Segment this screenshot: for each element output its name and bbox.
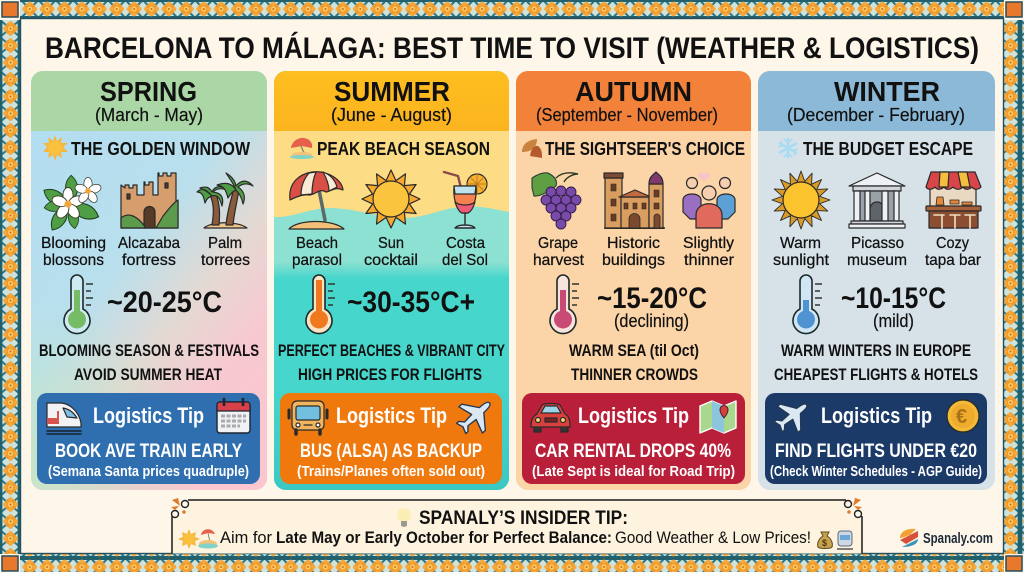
icon: picasso museum xyxy=(849,173,905,228)
icon: money bag: $ xyxy=(822,538,827,548)
label: Slightly xyxy=(683,235,734,252)
logistics tip: autumn xyxy=(522,393,745,484)
spring months: (March - May) xyxy=(95,105,203,125)
icon: parasol emoji xyxy=(290,138,314,159)
icon: blossoms xyxy=(41,175,102,233)
label xyxy=(533,235,585,269)
icon: train xyxy=(837,531,853,549)
label: thinner xyxy=(684,252,735,269)
corner ornament right xyxy=(844,498,864,518)
insider text xyxy=(220,528,811,547)
icon: euro coin: € xyxy=(956,406,967,428)
temperature: ~10-15°C xyxy=(841,282,946,315)
icon: car xyxy=(531,404,570,432)
autumn notes: THINNER CROWDS xyxy=(571,365,698,384)
summer body xyxy=(274,71,509,490)
insider text: Aim for xyxy=(220,528,272,547)
icon: sun emoji xyxy=(43,135,68,161)
temperature: ~15-20°C xyxy=(597,282,707,315)
summer heading: SUMMER xyxy=(334,76,450,107)
logistics main: CAR RENTAL DROPS 40% xyxy=(535,440,731,462)
logistics title: Logistics Tip xyxy=(336,403,447,428)
icon: grapes xyxy=(532,173,581,229)
autumn body xyxy=(516,71,751,490)
label: Sun xyxy=(378,235,404,252)
spring body xyxy=(31,71,267,490)
label: blossons xyxy=(43,252,104,269)
logistics main: BOOK AVE TRAIN EARLY xyxy=(55,440,242,462)
label xyxy=(364,235,418,269)
label: Historic xyxy=(607,235,660,252)
summer notes: PERFECT BEACHES & VIBRANT CITY xyxy=(278,341,505,360)
logistics title: Logistics Tip xyxy=(93,403,204,428)
summer notes: HIGH PRICES FOR FLIGHTS xyxy=(298,365,482,384)
icon: train xyxy=(47,403,81,434)
label xyxy=(442,235,488,269)
label: Warm xyxy=(780,235,821,252)
icon: snowflake xyxy=(778,138,798,158)
label xyxy=(773,235,830,269)
label: Cozy xyxy=(936,235,969,252)
panel: autumn xyxy=(516,71,751,490)
winter heading: WINTER xyxy=(834,76,940,107)
label: del Sol xyxy=(442,252,488,269)
insider box xyxy=(172,500,862,554)
panel: winter xyxy=(758,71,995,490)
autumn subtitle: THE SIGHTSEER'S CHOICE xyxy=(545,139,745,159)
label: Picasso xyxy=(851,235,904,252)
icon: historic buildings xyxy=(604,172,664,228)
icon: leaves emoji xyxy=(522,139,542,158)
label: Costa xyxy=(446,235,485,252)
icon: beach parasol xyxy=(289,172,344,229)
logistics note: (Late Sept is ideal for Road Trip) xyxy=(532,463,735,480)
winter notes xyxy=(774,341,978,384)
label: sunlight xyxy=(773,252,830,269)
icon: thermometer xyxy=(793,275,822,334)
label: Blooming xyxy=(41,235,106,252)
label xyxy=(41,235,106,269)
icon: plane xyxy=(768,392,817,440)
label xyxy=(847,235,907,269)
label xyxy=(292,235,342,269)
temperature: ~20-25°C xyxy=(107,286,222,319)
spring notes: AVOID SUMMER HEAT xyxy=(74,365,222,384)
label: parasol xyxy=(292,252,342,269)
temperature note: (mild) xyxy=(873,311,914,331)
label xyxy=(602,235,665,269)
logistics tip: summer xyxy=(280,390,502,484)
label: Grape xyxy=(538,235,578,252)
logo xyxy=(900,529,993,547)
label: fortress xyxy=(122,252,176,269)
spring subtitle: THE GOLDEN WINDOW xyxy=(71,139,250,159)
label: museum xyxy=(847,252,907,269)
spring header xyxy=(31,71,267,131)
panel: summer xyxy=(274,71,509,490)
logistics note: (Semana Santa prices quadruple) xyxy=(48,463,249,480)
label: Beach xyxy=(296,235,338,252)
icon: light bulb xyxy=(397,508,411,527)
logo mark xyxy=(900,529,918,547)
spring notes xyxy=(39,341,259,384)
icon: bus xyxy=(289,401,327,434)
panel: insider tip xyxy=(170,498,864,554)
insider text: Good Weather & Low Prices! xyxy=(615,528,811,547)
icon: thermometer xyxy=(550,275,579,334)
label: Palm xyxy=(208,235,242,252)
winter header xyxy=(758,71,995,131)
label: cocktail xyxy=(364,252,418,269)
label xyxy=(925,235,982,269)
corner ornament left xyxy=(170,498,188,518)
label: torrees xyxy=(201,252,250,269)
icon: calendar xyxy=(217,398,250,433)
autumn months: (September - November) xyxy=(536,105,718,125)
spring notes: BLOOMING SEASON & FESTIVALS xyxy=(39,341,259,360)
autumn notes xyxy=(569,341,699,384)
temperature note: (declining) xyxy=(614,311,689,331)
label xyxy=(118,235,180,269)
icon: thermometer xyxy=(64,275,93,334)
winter months: (December - February) xyxy=(787,105,965,125)
temperature: ~30-35°C+ xyxy=(347,286,475,319)
insider heading: SPANALY’S INSIDER TIP: xyxy=(419,508,628,529)
autumn header xyxy=(516,71,751,131)
winter body xyxy=(758,71,995,490)
label: Alcazaba xyxy=(118,235,180,252)
summer header xyxy=(274,71,509,131)
label xyxy=(201,235,250,269)
summer notes xyxy=(278,341,505,384)
label: tapa bar xyxy=(925,252,982,269)
icon: map xyxy=(700,401,736,433)
icon: tapa bar xyxy=(926,172,981,228)
label: harvest xyxy=(533,252,585,269)
icon: island xyxy=(198,529,218,548)
icon: alcazaba fortress xyxy=(121,173,178,228)
summer subtitle: PEAK BEACH SEASON xyxy=(317,139,490,159)
winter subtitle: THE BUDGET ESCAPE xyxy=(803,139,973,159)
icon: plane xyxy=(449,390,501,442)
icon: cocktail glass xyxy=(444,172,487,228)
logistics title: Logistics Tip xyxy=(821,403,932,428)
logistics main: FIND FLIGHTS UNDER €20 xyxy=(775,440,977,462)
logo text: Spanaly.com xyxy=(923,530,993,547)
icon: warm sunlight xyxy=(772,171,830,229)
logistics title: Logistics Tip xyxy=(578,403,689,428)
icon: euro coin xyxy=(947,400,979,432)
autumn heading: AUTUMN xyxy=(575,76,692,107)
icon: sun xyxy=(178,529,200,549)
logistics note: (Trains/Planes often sold out) xyxy=(297,463,485,480)
summer months: (June - August) xyxy=(331,105,452,125)
icon: palm trees xyxy=(197,173,253,228)
winter notes: WARM WINTERS IN EUROPE xyxy=(781,341,971,360)
label: buildings xyxy=(602,252,665,269)
icon: thermometer xyxy=(306,275,335,334)
logistics tip: winter xyxy=(765,392,987,484)
insider text: Late May or Early October for Perfect Balance: xyxy=(276,528,612,547)
label xyxy=(683,235,735,269)
icon: sun cocktail xyxy=(362,170,420,228)
logistics tip: spring xyxy=(37,393,260,484)
icon: people xyxy=(683,173,735,228)
spring heading: SPRING xyxy=(100,76,197,107)
icon: money bag xyxy=(818,532,832,548)
panel: spring xyxy=(31,71,267,490)
autumn notes: WARM SEA (til Oct) xyxy=(569,341,699,360)
logistics main: BUS (ALSA) AS BACKUP xyxy=(300,440,482,462)
